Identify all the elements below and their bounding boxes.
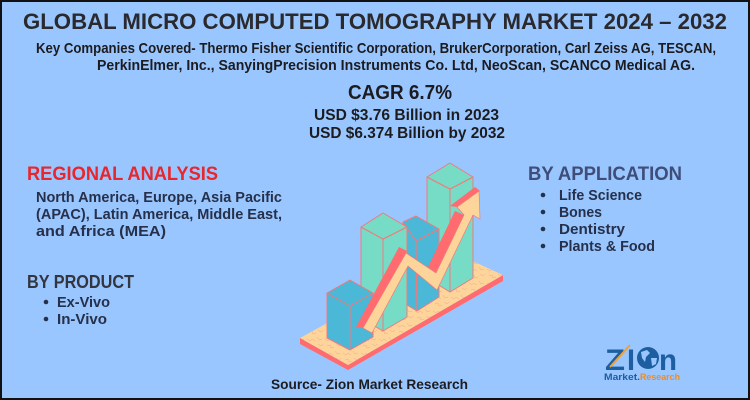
regional analysis text: and Africa (MEA) — [36, 223, 166, 240]
source: Source- Zion Market Research — [271, 376, 468, 392]
title: GLOBAL MICRO COMPUTED TOMOGRAPHY MARKET 2024 – 2032 — [23, 9, 727, 34]
logo: Zion Market Research: I — [627, 344, 635, 377]
logo globe — [637, 347, 659, 369]
by product list: In-Vivo — [57, 311, 107, 328]
tall green bar — [427, 163, 473, 292]
regional analysis text: North America, Europe, Asia Pacific — [36, 189, 282, 206]
arrow shadow — [356, 187, 480, 328]
regional analysis text — [36, 189, 282, 240]
mid green bar — [361, 213, 407, 331]
logo: Zion Market Research — [604, 344, 680, 383]
by application list — [541, 187, 655, 255]
by application list: Dentistry — [559, 221, 626, 238]
short blue bar — [327, 280, 373, 350]
regional analysis heading: REGIONAL ANALYSIS — [27, 163, 218, 185]
by application list: Life Science — [559, 187, 642, 204]
logo swoosh — [610, 345, 630, 367]
platform — [300, 253, 503, 370]
logo tagline: Market. — [604, 372, 640, 383]
key companies text — [36, 40, 716, 74]
market size block: CAGR 6.7% — [348, 82, 452, 104]
market size block: USD $6.374 Billion by 2032 — [309, 125, 505, 142]
market size block: USD $3.76 Billion in 2023 — [314, 107, 499, 124]
logo: Zion Market Research: n — [659, 344, 677, 377]
by application list: Plants & Food — [559, 238, 655, 255]
regional analysis text: (APAC), Latin America, Middle East, — [36, 206, 282, 223]
isometric bar chart with rising arrow — [300, 163, 503, 370]
market size block — [309, 82, 505, 142]
by application heading: BY APPLICATION — [528, 164, 682, 185]
arrow — [363, 191, 480, 333]
logo wordmark: Z — [605, 344, 625, 377]
key companies text: PerkinElmer, Inc., SanyingPrecision Instruments Co. Ltd, NeoScan, SCANCO Medical AG. — [97, 57, 695, 74]
by application list: Bones — [559, 204, 602, 221]
mid blue bar — [403, 216, 439, 311]
logo: Zion Market Research: Research — [640, 372, 680, 383]
by product list — [44, 294, 110, 328]
by product heading: BY PRODUCT — [27, 272, 134, 292]
by product list: Ex-Vivo — [57, 294, 110, 311]
